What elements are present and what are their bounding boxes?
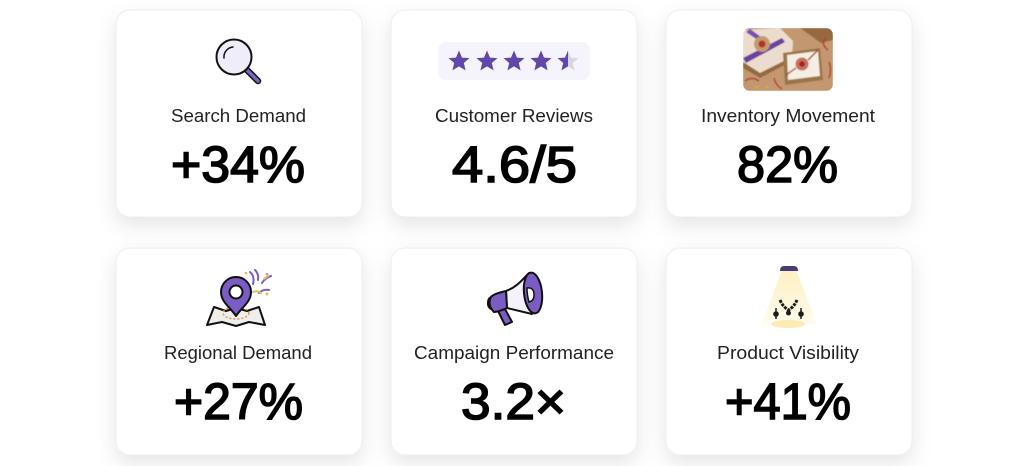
image: gift boxes with rakhi xyxy=(743,28,833,91)
panel: inventory movement xyxy=(666,10,912,217)
value: 3.2×: 3.2× xyxy=(461,373,566,430)
icon: spotlight on jewellery xyxy=(762,266,817,328)
panel: regional demand xyxy=(116,248,362,455)
label: search demand: Search Demand xyxy=(171,105,306,126)
panel: campaign performance xyxy=(391,248,637,455)
panel: product visibility xyxy=(666,248,912,455)
label: customer reviews: Customer Reviews xyxy=(435,105,593,126)
value: 4.6/5: 4.6/5 xyxy=(452,136,577,193)
icon: map pin with fireworks xyxy=(207,270,271,326)
label: product visibility: Product Visibility xyxy=(717,342,860,363)
value: 82%: 82% xyxy=(737,136,838,193)
value: +34%: +34% xyxy=(171,136,305,193)
value: +41%: +41% xyxy=(725,373,851,430)
label: campaign performance: Campaign Performance xyxy=(414,342,614,363)
icon: star rating xyxy=(438,42,590,80)
icon: magnifying glass xyxy=(216,40,258,81)
label: inventory movement: Inventory Movement xyxy=(701,105,875,126)
label: regional demand: Regional Demand xyxy=(164,342,312,363)
panel: customer reviews xyxy=(391,10,637,217)
value: +27%: +27% xyxy=(174,373,303,430)
icon: megaphone xyxy=(488,272,544,325)
panel: search demand xyxy=(116,10,362,217)
